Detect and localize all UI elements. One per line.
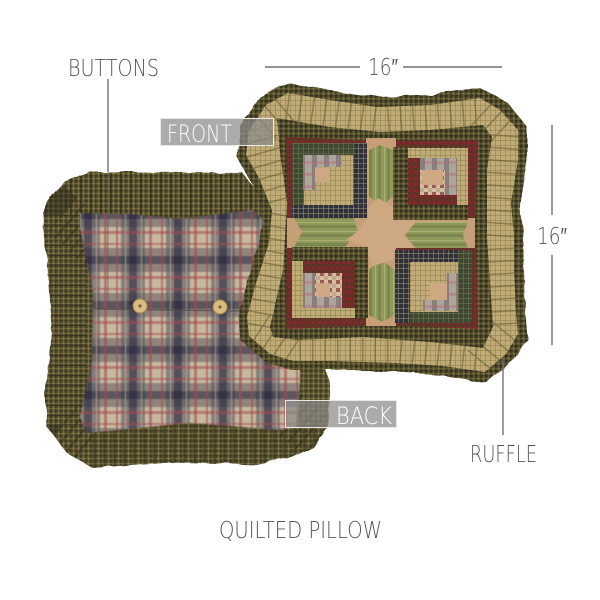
flap fold: [96, 309, 240, 311]
callout: ruffle: [470, 359, 537, 468]
block: top left: [292, 143, 367, 218]
label: BACK: [286, 400, 396, 430]
block: bottom left: [292, 247, 368, 318]
back ruffle: [42, 171, 330, 468]
center star: [346, 198, 417, 266]
dimension: height 16 inches: 16″: [537, 224, 567, 250]
callout: buttons: BUTTONS: [68, 56, 159, 82]
back plaid panel: [80, 210, 300, 433]
block: top right: [393, 147, 468, 220]
back pillow: [42, 171, 330, 468]
quilt border: [270, 118, 493, 348]
front pillow: [230, 75, 535, 390]
label: BACK: BACK: [336, 402, 392, 430]
callout: ruffle: RUFFLE: [470, 442, 537, 468]
label: FRONT: FRONT: [167, 120, 232, 148]
caption: QUILTED PILLOW: [219, 518, 382, 544]
front ruffle: [230, 75, 535, 390]
right button: [213, 300, 227, 314]
infographic canvas: [42, 58, 567, 541]
label: FRONT: [160, 118, 274, 148]
callout: buttons: [68, 56, 159, 307]
dimension: width 16 inches: 16″: [368, 55, 398, 81]
red ring: [285, 137, 478, 329]
left button: [132, 299, 147, 313]
block: bottom right: [395, 250, 472, 323]
center sashing: [287, 138, 475, 326]
